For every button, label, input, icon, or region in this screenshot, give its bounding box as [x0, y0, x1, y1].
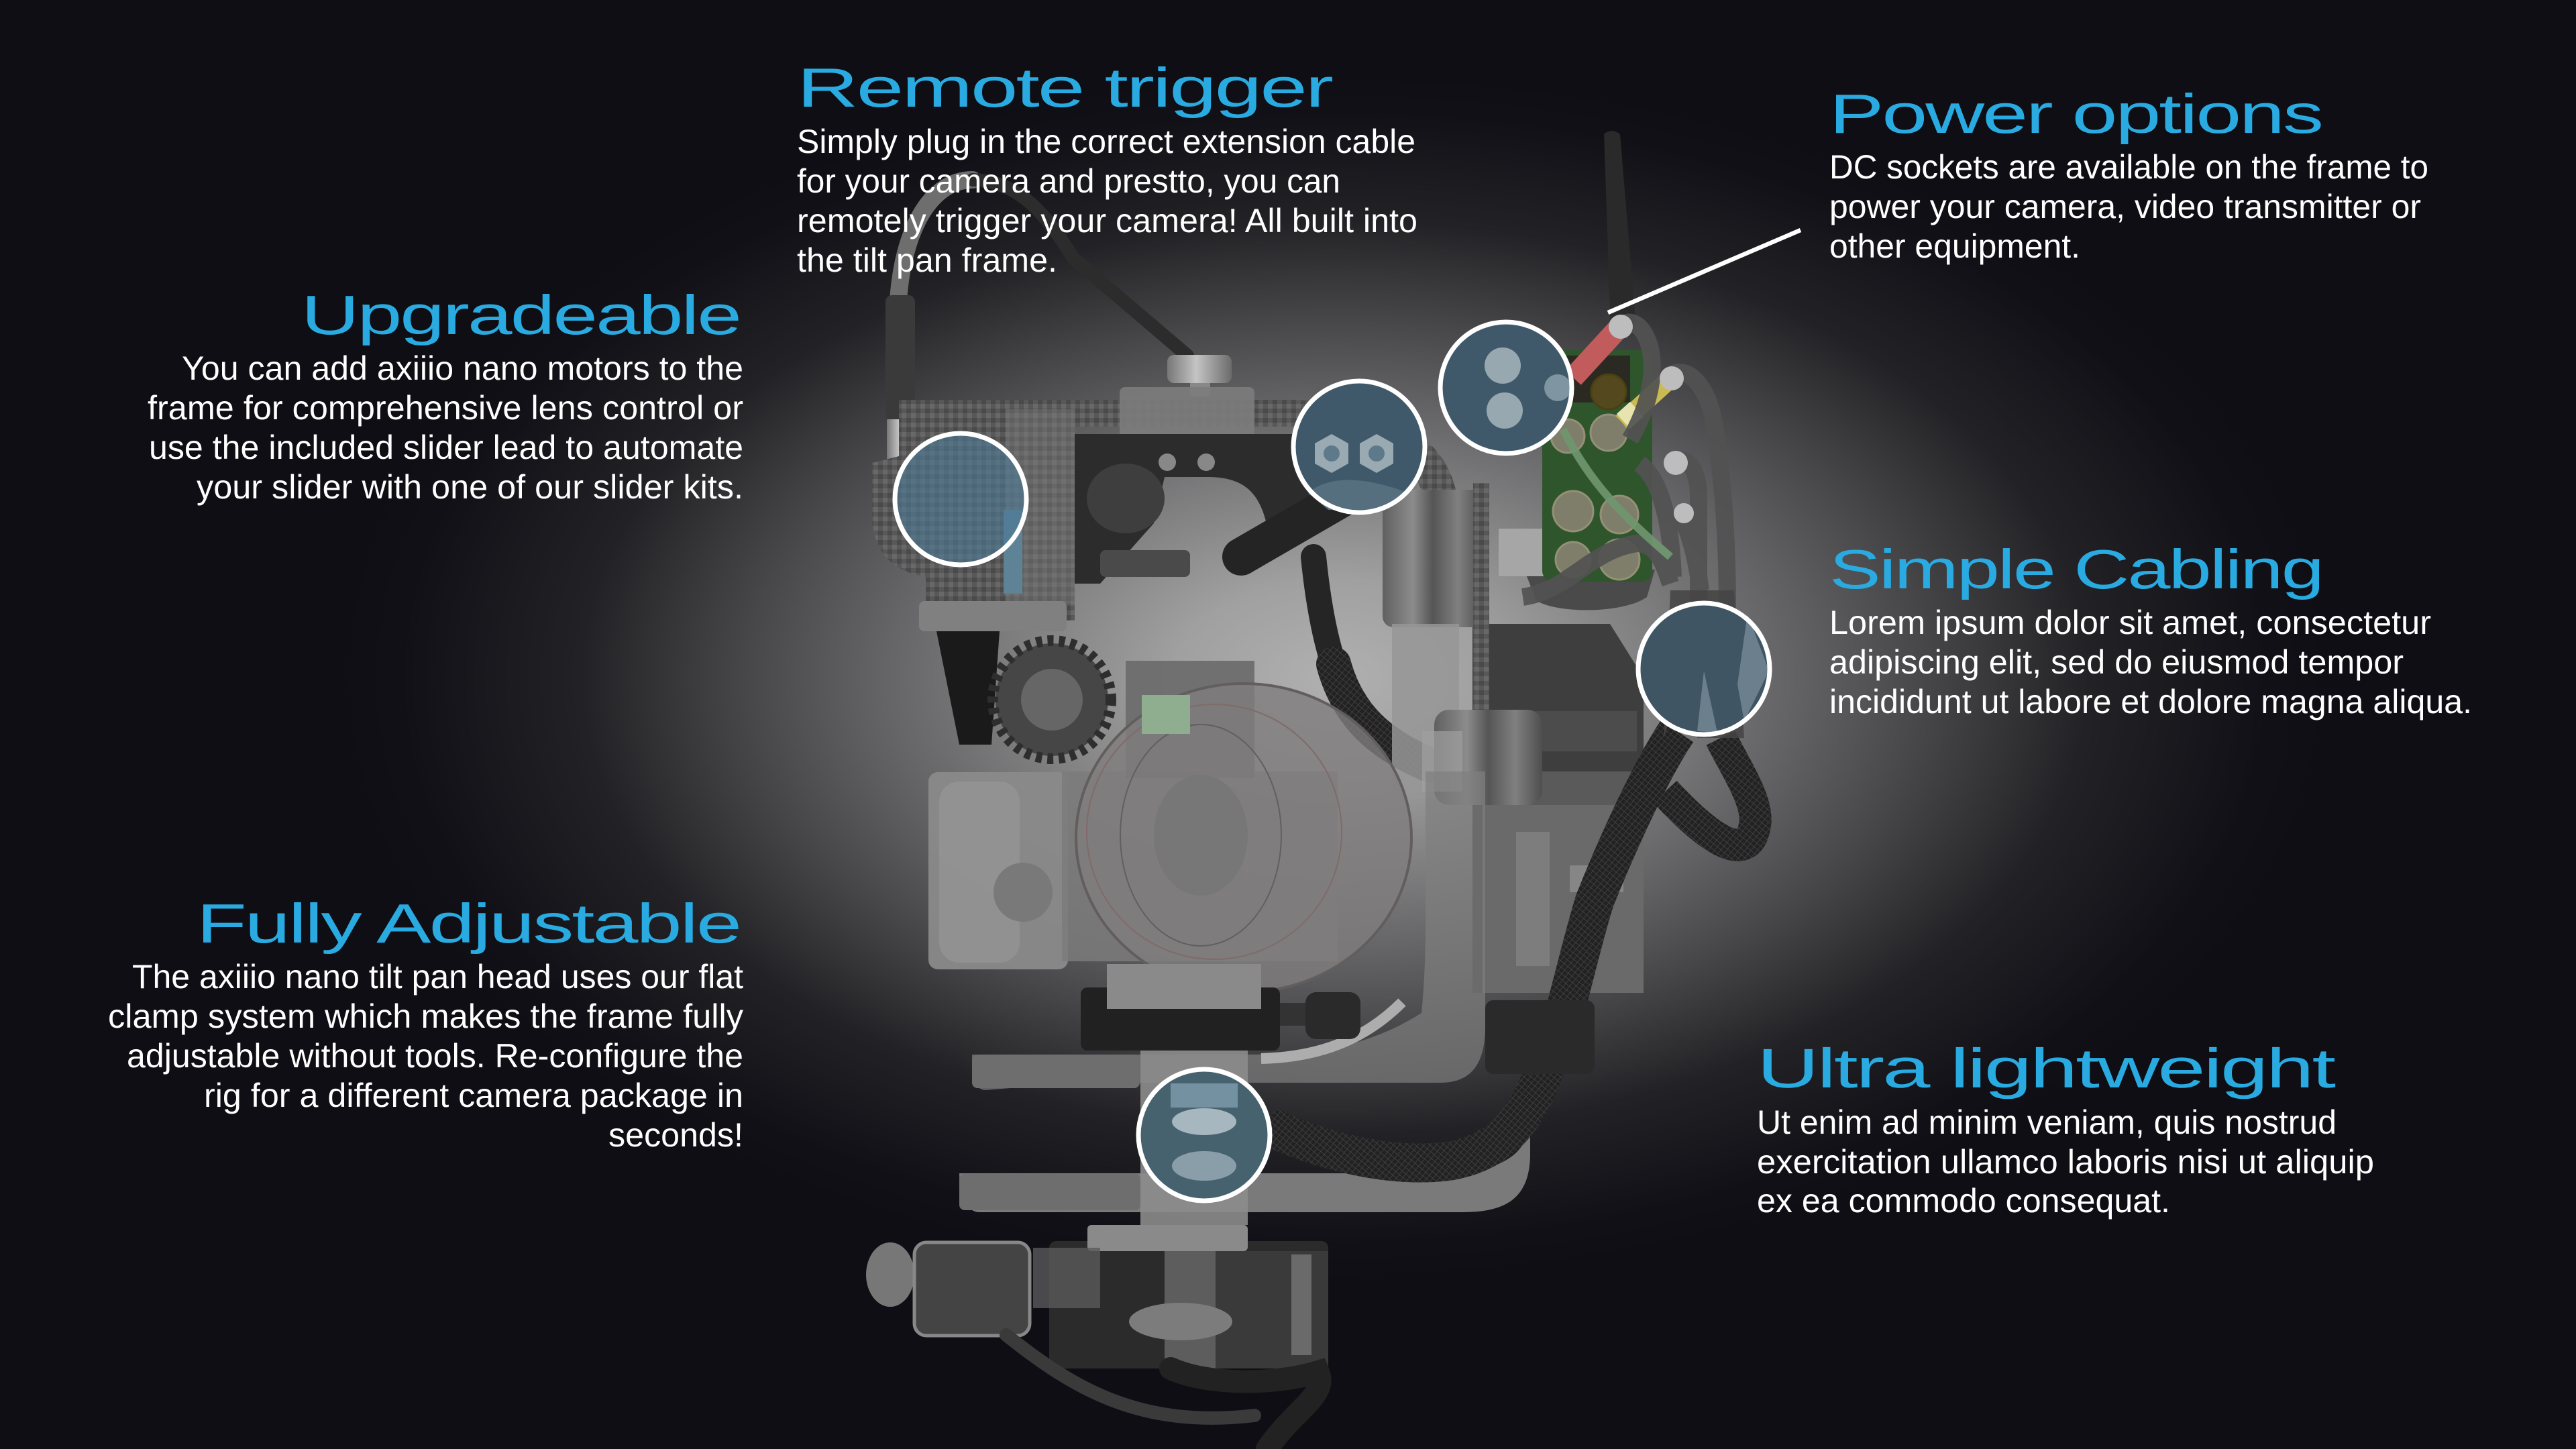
highlight: stack clamp [1138, 1069, 1270, 1201]
leader line to power options [1608, 230, 1801, 313]
body: The axiiio nano tilt pan head uses our flat [132, 958, 743, 996]
thumb screw [1167, 355, 1232, 396]
body: Ut enim ad minim veniam, quis nostrud [1757, 1104, 2337, 1141]
text block: remote trigger [797, 56, 1417, 279]
black bracket [1075, 434, 1315, 584]
body: seconds! [608, 1116, 743, 1154]
body [1829, 604, 2472, 720]
circuit board housing [1499, 350, 1655, 610]
side control box [866, 1242, 1030, 1336]
body: use the included slider lead to automate [149, 429, 743, 466]
body: power your camera, video transmitter or [1829, 188, 2421, 225]
heading: Simple Cabling [1829, 538, 2322, 600]
body: Simply plug in the correct extension cable [797, 123, 1415, 160]
body: remotely trigger your camera! All built into [797, 202, 1417, 239]
heading: Upgradeable [301, 284, 740, 346]
heading: Ultra lightweight [1757, 1037, 2336, 1099]
body [148, 350, 743, 506]
body: clamp system which makes the frame fully [108, 998, 743, 1035]
highlight: power sockets [1440, 322, 1572, 453]
lower L bracket [959, 1117, 1530, 1212]
highlight: upgradeable motor [895, 433, 1026, 565]
text block: power options [1829, 83, 2428, 265]
body [1757, 1104, 2374, 1220]
center clamp block [1120, 387, 1254, 439]
rear body of tilt frame [1472, 624, 1644, 993]
body: for your camera and prestto, you can [797, 162, 1340, 200]
camera screen [1142, 695, 1190, 734]
focus gear [993, 641, 1111, 759]
body: Lorem ipsum dolor sit amet, consectetur [1829, 604, 2431, 641]
text block: ultra lightweight [1757, 1037, 2374, 1220]
highlight: simple cabling [1638, 603, 1770, 735]
body: your slider with one of our slider kits. [197, 468, 743, 506]
pan motor unit [1033, 1225, 1328, 1371]
body: other equipment. [1829, 227, 2080, 265]
body: the tilt pan frame. [797, 241, 1057, 279]
camera body [928, 771, 1338, 969]
camera top [1126, 661, 1254, 778]
body: adjustable without tools. Re-configure the [127, 1037, 743, 1075]
cable clamp [1485, 1000, 1595, 1074]
power cables [1523, 323, 1727, 610]
cable tips [1609, 315, 1694, 523]
text block: upgradeable [148, 284, 743, 506]
body: frame for comprehensive lens control or [148, 389, 743, 427]
tall cables: braided main run [1267, 731, 1756, 1163]
heading: Power options [1829, 83, 2322, 145]
trigger cable [898, 180, 1187, 356]
heading: Remote trigger [797, 56, 1333, 119]
body: You can add axiiio nano motors to the [182, 350, 743, 387]
body: exercitation ullamco laboris nisi ut aliquip [1757, 1143, 2374, 1181]
body [1829, 148, 2428, 265]
motor housing [872, 400, 1075, 631]
board connectors [1551, 374, 1640, 580]
body: DC sockets are available on the frame to [1829, 148, 2428, 186]
body: rig for a different camera package in [204, 1077, 743, 1114]
text block: fully adjustable [108, 892, 743, 1154]
body: ex ea commodo consequat. [1757, 1182, 2170, 1220]
device: axiiio nano tilt pan rig [866, 131, 1756, 1449]
heading: Fully Adjustable [197, 892, 740, 955]
trigger cable connector [885, 295, 915, 473]
upper L bracket [972, 771, 1485, 1090]
thick cable trunk under the highlight [1664, 590, 1744, 738]
solid and braided cable from handle [1313, 557, 1429, 765]
body [108, 958, 743, 1154]
diagonal handle [1241, 483, 1368, 557]
body: incididunt ut labore et dolore magna aliqua. [1829, 683, 2472, 720]
motor post [936, 631, 1000, 745]
highlight: remote trigger socket [1293, 381, 1425, 513]
body: adipiscing elit, sed do eiusmod tempor [1829, 643, 2404, 681]
carbon top bar and arch [978, 400, 1456, 493]
antenna [1604, 131, 1636, 329]
lens [1076, 684, 1411, 992]
red and yellow sleeved cables [1573, 330, 1668, 423]
body [797, 123, 1417, 279]
bracket knob [1087, 464, 1190, 577]
top clamp [1081, 964, 1360, 1051]
stack column [1140, 1051, 1248, 1225]
text block: simple cabling [1829, 538, 2472, 720]
upper and lower left plate ends [959, 1055, 1140, 1210]
lower cables [1006, 1335, 1320, 1449]
highlight circles [895, 322, 1770, 1201]
central column [1383, 483, 1542, 805]
